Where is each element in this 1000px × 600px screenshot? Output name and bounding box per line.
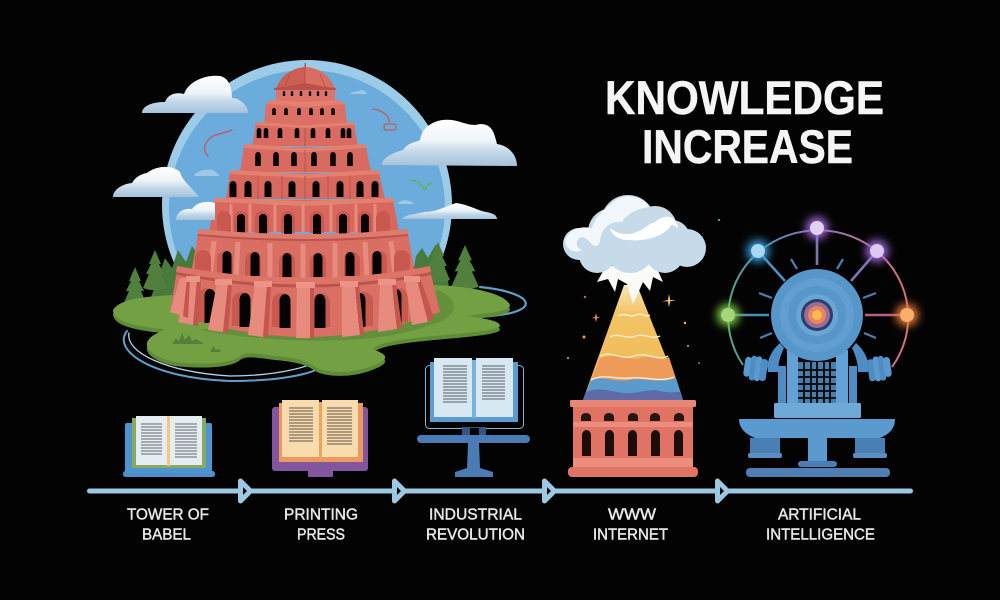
label: artificial intelligence: ARTIFICIAL xyxy=(778,506,861,524)
arrow 4 xyxy=(718,481,728,501)
sky circle xyxy=(162,60,452,350)
tier 7 xyxy=(264,100,347,124)
pedestal xyxy=(739,403,895,477)
river xyxy=(124,287,526,381)
tier 5 xyxy=(240,144,371,172)
icon: book on purple stand (printing press) xyxy=(272,400,368,477)
tier 3 xyxy=(209,198,399,234)
title xyxy=(605,71,884,173)
label: printing press: PRINTING xyxy=(284,506,358,524)
label: printing press xyxy=(284,506,358,544)
label: artificial intelligence xyxy=(766,506,875,544)
label: www internet xyxy=(593,506,668,544)
label: tower of babel: TOWER OF xyxy=(127,506,209,524)
label: www internet: WWW xyxy=(608,506,657,524)
icon: book on tablet (tower of babel) xyxy=(123,416,215,477)
arrow 1 xyxy=(240,481,250,501)
label: artificial intelligence: INTELLIGENCE xyxy=(766,526,875,544)
clouds xyxy=(113,76,517,220)
domed building xyxy=(568,400,698,477)
tier 6 xyxy=(252,122,358,146)
icon: erupting tower (www internet) xyxy=(563,195,720,477)
tier 8 xyxy=(274,85,336,103)
illustration: tower of babel scene xyxy=(113,60,526,381)
arrow 2 xyxy=(394,481,404,501)
tier 2 xyxy=(188,229,418,290)
icon: book on monitor (industrial revolution) xyxy=(417,358,530,477)
timeline with arrows xyxy=(87,481,913,501)
knowledge cone xyxy=(583,285,683,400)
sparkles xyxy=(567,219,720,364)
tier 4 xyxy=(226,170,385,199)
arrow 3 xyxy=(544,481,554,501)
label: tower of babel xyxy=(127,506,209,544)
tower xyxy=(170,63,440,338)
core disk xyxy=(771,269,863,361)
robot body xyxy=(778,350,857,404)
label: industrial revolution xyxy=(426,506,525,544)
explosion cloud xyxy=(563,195,706,304)
robot arms xyxy=(742,343,893,383)
label: tower of babel: BABEL xyxy=(142,526,191,544)
label: industrial revolution: REVOLUTION xyxy=(426,526,525,544)
label: printing press: PRESS xyxy=(297,526,345,544)
tier 1 base with columns xyxy=(170,266,440,338)
title: INCREASE xyxy=(642,120,853,173)
neural arc with nodes xyxy=(717,217,918,367)
title: KNOWLEDGE xyxy=(605,71,884,124)
icon: AI robot xyxy=(717,217,918,477)
trees xyxy=(123,242,479,310)
sky doodles xyxy=(205,109,432,190)
island xyxy=(113,285,510,376)
dome xyxy=(276,63,335,89)
label: industrial revolution: INDUSTRIAL xyxy=(429,506,522,524)
label: www internet: INTERNET xyxy=(593,526,668,544)
